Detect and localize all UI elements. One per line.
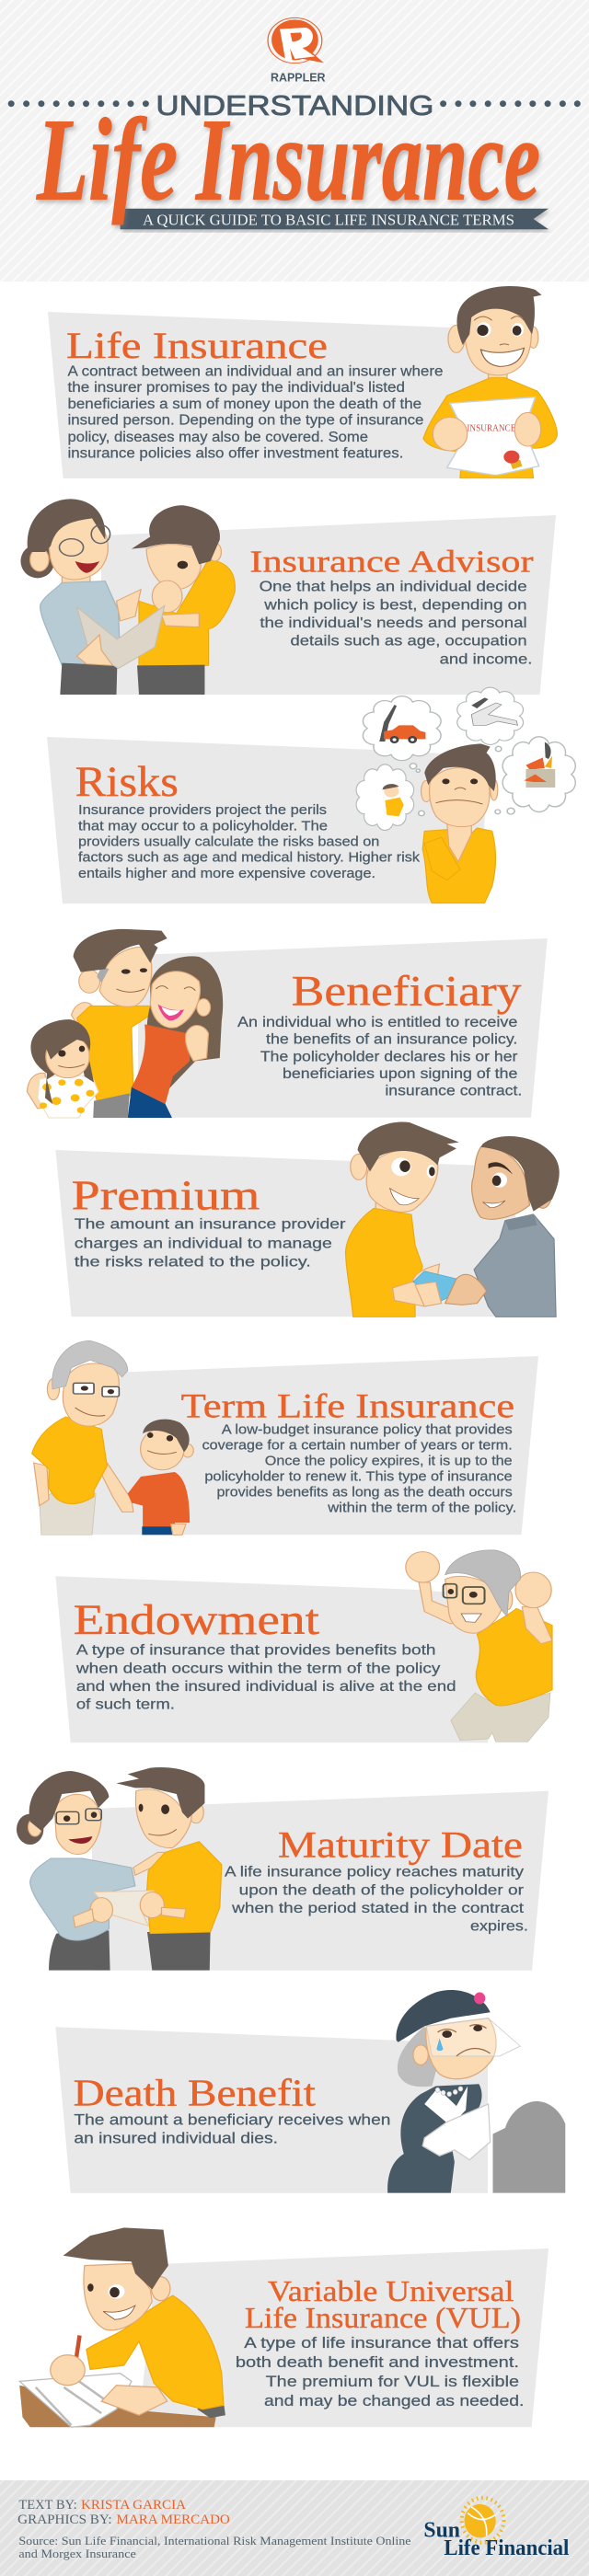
illustration: man holding insurance paper	[423, 286, 557, 478]
credit: graphics: GRAPHICS BY:	[17, 2513, 112, 2527]
body text: beneficiaries a sum of money upon the death of the	[68, 397, 422, 412]
banner text: A QUICK GUIDE TO BASIC LIFE INSURANCE TERMS	[143, 211, 514, 228]
heading: Beneficiary	[292, 967, 522, 1015]
panel background	[47, 737, 488, 903]
thought bubble: house fire	[502, 737, 575, 812]
illustration: advisor and client reading a folder	[20, 499, 235, 695]
body text	[236, 2335, 524, 2409]
body text: factors such as age and medical history. Higher risk	[78, 851, 421, 866]
panel: Premium	[55, 1121, 560, 1317]
logo: Rappler	[268, 17, 324, 63]
illustration: grandfather and grandson	[32, 1340, 193, 1535]
body text: of such term.	[76, 1697, 175, 1713]
panel: Maturity Date	[17, 1767, 549, 1971]
source note	[18, 2535, 411, 2560]
title line: Life Insurance	[36, 95, 540, 225]
panel: Life Insurance	[48, 286, 557, 478]
right man	[474, 1214, 556, 1317]
body text: insured person. Depending on the type of insurance	[68, 413, 423, 429]
body text: entails higher and more expensive coverage.	[78, 867, 375, 881]
body text: policy, diseases may also be covered. Some	[68, 430, 368, 445]
source note: and Morgex Insurance	[18, 2547, 136, 2560]
body text: upon the death of the policyholder or	[239, 1882, 525, 1898]
illustration: family	[27, 929, 223, 1118]
body text: when death occurs within the term of the policy	[75, 1661, 440, 1676]
thought bubble: plane	[457, 687, 524, 744]
panel: Death Benefit	[55, 1990, 565, 2193]
man	[422, 828, 496, 903]
body text	[202, 1422, 516, 1515]
heading: Risks	[75, 758, 179, 806]
heading: Death Benefit	[74, 2071, 317, 2113]
grandson	[128, 1472, 190, 1527]
left man	[375, 1202, 398, 1224]
woman	[17, 1814, 43, 1845]
credit: graphics	[17, 2513, 230, 2527]
body text: the insurer promises to pay the individual's listed	[68, 380, 405, 396]
body text: insurance contract.	[385, 1084, 522, 1099]
body text: coverage for a certain number of years or term.	[202, 1438, 513, 1453]
folder	[77, 605, 165, 669]
illustration: advisor and client with envelope	[17, 1767, 222, 1971]
heading: Insurance Advisor	[249, 546, 534, 580]
logo wordmark: RAPPLER	[271, 70, 326, 84]
panel: Beneficiary	[27, 929, 548, 1118]
body text: the risks related to the policy.	[75, 1255, 311, 1271]
body text: A low-budget insurance policy that provides	[222, 1422, 513, 1437]
thought bubble: car crash	[363, 696, 441, 761]
dotted rule left	[8, 100, 149, 107]
body text	[74, 2112, 390, 2147]
body text: within the term of the policy.	[327, 1501, 516, 1515]
body text: an insured individual dies.	[74, 2131, 278, 2147]
header	[8, 17, 581, 229]
body text	[75, 1217, 346, 1271]
panel background	[101, 515, 556, 695]
body text: Insurance providers project the perils	[78, 803, 327, 818]
heading: Term Life Insurance	[181, 1388, 514, 1426]
body text: the benefits of an insurance policy.	[266, 1032, 517, 1048]
body text: The premium for VUL is flexible	[266, 2374, 519, 2390]
grandfather	[40, 1493, 96, 1535]
body text: details such as age, occupation	[291, 634, 527, 650]
logo: Sun Life Financial: Sun	[423, 2519, 460, 2543]
banner ribbon	[121, 209, 549, 229]
body text: both death benefit and investment.	[236, 2354, 519, 2371]
body text	[68, 363, 444, 461]
credit: graphics: MARA MERCADO	[116, 2513, 230, 2527]
title line: Understanding: UNDERSTANDING	[156, 89, 433, 121]
mother	[147, 956, 223, 1088]
title line: Life Insurance: Life	[36, 95, 178, 225]
man	[139, 559, 235, 669]
panel background	[92, 1791, 549, 1971]
body text: which policy is best, depending on	[263, 597, 527, 613]
illustration: man signing a form at a desk	[19, 2227, 225, 2427]
illustration: policyholder paying an agent	[346, 1121, 560, 1317]
body text: the individual's needs and personal	[260, 615, 527, 631]
logo: Sun Life Financial	[423, 2498, 570, 2560]
panel background	[138, 2248, 549, 2427]
footer	[0, 2480, 589, 2576]
heading: Variable Universal	[268, 2274, 514, 2307]
illustration: elderly man flexing	[406, 1550, 552, 1742]
credit: text: TEXT BY:	[18, 2498, 77, 2513]
header background	[0, 0, 589, 282]
heading: Premium	[72, 1171, 260, 1218]
heading	[245, 2274, 521, 2334]
body text: A contract between an individual and an insurer where	[68, 363, 444, 379]
footer background	[0, 2480, 589, 2576]
body text: A type of life insurance that offers	[244, 2335, 519, 2352]
father	[72, 1003, 92, 1021]
panel background	[48, 312, 497, 478]
body text: One that helps an individual decide	[260, 579, 527, 594]
body text	[78, 803, 421, 881]
body text: Once the policy expires, it is up to the	[265, 1454, 513, 1468]
body text: policyholder to renew it. This type of insurance	[204, 1469, 513, 1484]
sun icon	[462, 2498, 503, 2543]
panel: Variable Universal Life Insurance	[19, 2227, 549, 2427]
panel background	[74, 1356, 538, 1535]
body text: provides benefits as long as the death occurs	[217, 1485, 513, 1500]
body text	[225, 1865, 528, 1935]
body text: The amount a beneficiary receives when	[74, 2112, 390, 2129]
body text: when the period stated in the contract	[231, 1901, 525, 1916]
body text: An individual who is entitled to receive	[237, 1015, 517, 1030]
body text: expires.	[470, 1919, 528, 1935]
body text: insurance policies also offer investment features.	[68, 445, 403, 461]
body text: A type of insurance that provides benefits both	[76, 1643, 436, 1659]
body text	[75, 1643, 456, 1713]
credit: text: KRISTA GARCIA	[81, 2498, 186, 2513]
dotted rule right	[440, 100, 581, 107]
logo: Sun Life Financial: Life Financial	[444, 2536, 570, 2560]
illustration: worried man with thought bubbles	[356, 687, 575, 903]
daughter	[27, 1073, 49, 1109]
panel background	[138, 938, 548, 1118]
heading: Life Insurance	[66, 325, 328, 366]
panel: Endowment	[55, 1550, 552, 1742]
body text: beneficiaries upon signing of the	[283, 1066, 517, 1082]
credit: text	[18, 2498, 186, 2513]
panel: Risks	[47, 687, 575, 903]
panel background	[55, 2027, 488, 2193]
body text	[260, 579, 532, 667]
body text: providers usually calculate the risks based on	[78, 835, 379, 850]
woman	[20, 545, 54, 578]
heading: Maturity Date	[278, 1823, 523, 1865]
body text: and income.	[440, 651, 532, 667]
body text	[237, 1015, 522, 1099]
panel: Term Life Insurance	[32, 1340, 538, 1535]
source note: Source: Sun Life Financial, International Risk Management Institute Online	[18, 2535, 411, 2547]
panel: Insurance Advisor	[20, 499, 556, 695]
paper label: INSURANCE	[467, 424, 516, 433]
panel background	[55, 1576, 488, 1742]
heading: Life Insurance (VUL)	[245, 2301, 521, 2334]
heading: Endowment	[74, 1596, 319, 1644]
body text: The policyholder declares his or her	[260, 1049, 517, 1064]
body text: The amount an insurance provider	[75, 1217, 346, 1233]
man	[147, 1932, 211, 1971]
body text: charges an individual to manage	[75, 1236, 332, 1251]
body text: and when the insured individual is alive at the end	[76, 1679, 456, 1695]
body text: and may be changed as needed.	[264, 2393, 524, 2409]
thought bubble: man in pain	[356, 765, 414, 830]
panel background	[55, 1150, 515, 1317]
body text: that may occur to a policyholder. The	[78, 819, 328, 834]
envelope	[94, 1891, 154, 1926]
money	[413, 1271, 462, 1304]
illustration: widow at gravestone	[387, 1990, 565, 2193]
body text: A life insurance policy reaches maturity	[225, 1865, 524, 1880]
